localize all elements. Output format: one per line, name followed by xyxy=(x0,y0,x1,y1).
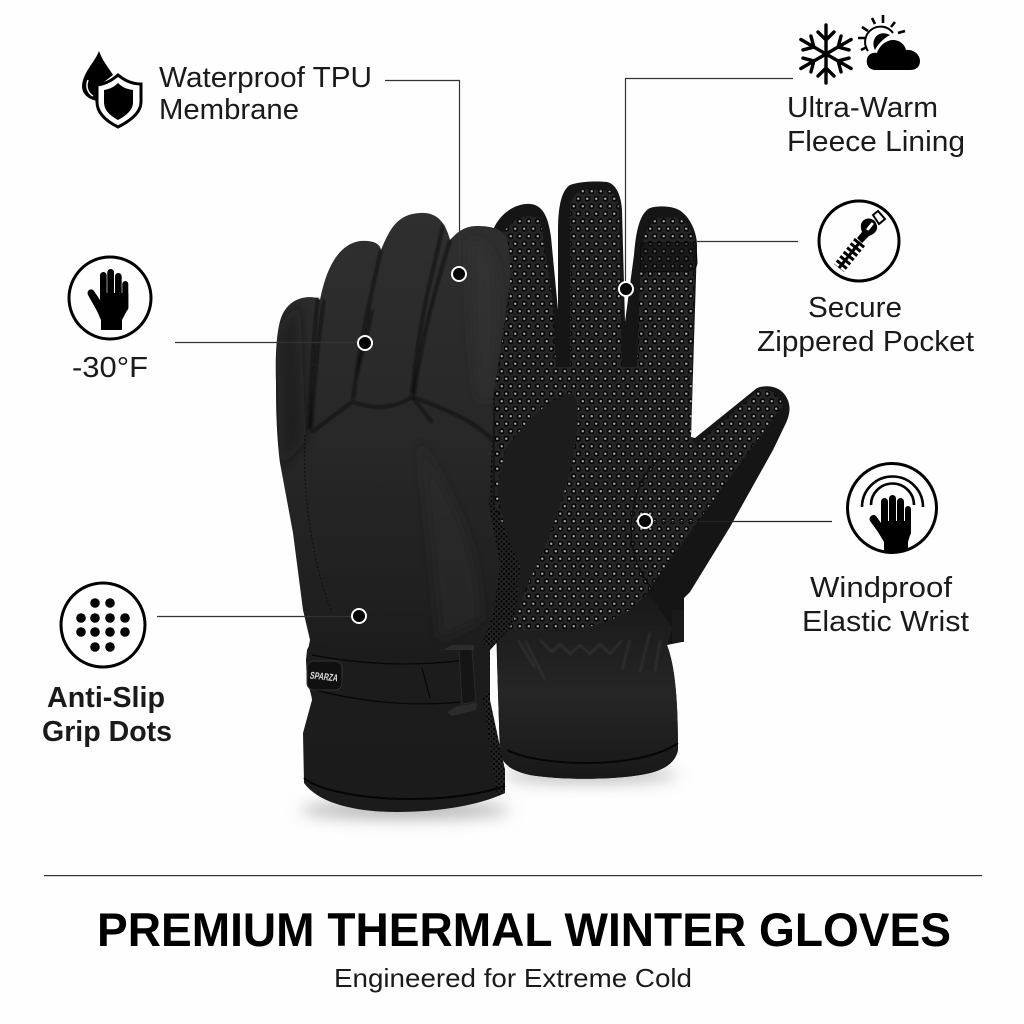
icon: hand in circle xyxy=(69,257,151,339)
icon: sun and cloud xyxy=(858,15,920,70)
text: fleece label xyxy=(787,92,965,158)
back stitching seam xyxy=(304,435,332,612)
fingertip touch patch xyxy=(640,243,697,272)
palm grip dot field xyxy=(495,189,783,640)
text: grip dots label: Grip Dots xyxy=(42,716,172,748)
icon: snowflake xyxy=(797,25,855,83)
cuff hem xyxy=(507,743,678,763)
callout: temperature leader line xyxy=(175,336,372,350)
text: zipper label: Zippered Pocket xyxy=(757,326,974,358)
side mesh panel xyxy=(483,283,521,796)
glove: back side with strap xyxy=(276,213,578,812)
callout: fleece leader line xyxy=(619,78,793,296)
upper buckle xyxy=(443,645,474,650)
callout: waterproof leader line xyxy=(385,80,466,281)
title: PREMIUM THERMAL WINTER GLOVES xyxy=(97,903,951,956)
gathered elastic wrist xyxy=(518,632,660,680)
wrist strap xyxy=(306,643,490,713)
text: waterproof label: Membrane xyxy=(159,94,299,126)
icon: wind hand xyxy=(848,464,936,556)
back glove shell xyxy=(276,213,512,812)
text: zipper label: Secure xyxy=(808,292,902,324)
strap brand label xyxy=(307,661,342,690)
text: grip dots label xyxy=(42,682,172,748)
strap stitching xyxy=(312,655,465,704)
lower buckle xyxy=(447,703,477,716)
finger seams xyxy=(309,225,492,440)
text: fleece label: Fleece Lining xyxy=(787,126,965,158)
glove shadows xyxy=(300,768,678,818)
text: wrist label: Windproof xyxy=(810,572,953,604)
icon: water drop and shield xyxy=(82,51,141,127)
strap loop xyxy=(459,648,476,704)
back thumb flap xyxy=(497,393,578,622)
side tab xyxy=(672,610,684,642)
text: grip dots label: Anti-Slip xyxy=(47,682,165,714)
callout: grip dots leader line xyxy=(157,609,366,623)
shell shading xyxy=(276,308,306,464)
palm glove outer shell xyxy=(490,181,790,779)
thumb patch seam xyxy=(631,458,662,590)
glove cuff hem xyxy=(304,778,505,799)
callout: zipper leader line xyxy=(697,240,798,242)
text: fleece label: Ultra-Warm xyxy=(787,92,938,124)
text: waterproof label: Waterproof TPU xyxy=(159,62,372,94)
text: waterproof label xyxy=(159,62,372,126)
palm cuff xyxy=(497,592,678,779)
icon: zipper xyxy=(819,201,899,281)
glove: palm side with grip dots xyxy=(490,181,790,779)
text: temperature label: -30°F xyxy=(72,352,148,384)
divider rule xyxy=(44,875,982,876)
text: wrist label xyxy=(802,572,969,638)
text: zipper label xyxy=(757,292,974,358)
text: wrist label: Elastic Wrist xyxy=(802,606,969,638)
subtitle: Engineered for Extreme Cold xyxy=(334,963,692,993)
icon: grip dots in circle xyxy=(61,583,145,667)
callout: wrist leader line xyxy=(638,514,832,528)
strap brand label: SPARZA xyxy=(309,671,338,684)
